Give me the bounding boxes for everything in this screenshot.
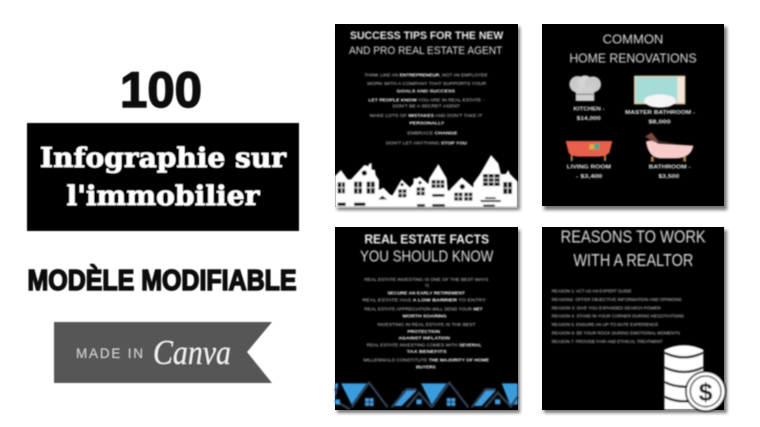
icon: bathroom window picture — [634, 76, 685, 108]
panel: reasons to work with a realtor — [542, 227, 727, 413]
panel: success tips — [335, 24, 520, 210]
heading: reasons: REASONS TO WORK — [561, 227, 706, 247]
reasons list: REASON 6: BE YOUR ROCK DURING EMOTIONAL MOMENTS — [552, 330, 680, 336]
title text: l'immobilier — [66, 181, 260, 212]
reasons list: REASON 1: ACT AS AN EXPERT GUIDE — [552, 288, 632, 294]
facts text: TO — [425, 283, 429, 289]
facts text: REAL ESTATE APPRECIATION WILL SEND YOUR NET — [364, 307, 483, 313]
panel: real estate facts: YOU SHOULD KNOW — [360, 249, 494, 266]
heading: facts: REAL ESTATE FACTS — [364, 232, 489, 247]
heading: reasons — [561, 227, 706, 270]
tips text: LET PEOPLE KNOW YOU ARE IN REAL ESTATE - — [368, 97, 485, 103]
room labels: $3,500 — [658, 174, 679, 180]
heading: renovations — [569, 32, 697, 65]
heading: reasons: WITH A REALTOR — [573, 250, 693, 270]
made in Canva ribbon: MADE IN — [76, 346, 143, 361]
reasons list — [552, 288, 684, 345]
heading: renovations: HOME RENOVATIONS — [569, 50, 697, 65]
heading: success tips — [349, 30, 504, 57]
icon: coin stack with dollar — [664, 345, 726, 412]
tips text — [364, 72, 488, 147]
heading: success tips: AND PRO REAL ESTATE AGENT — [349, 45, 503, 57]
heading: success tips: SUCCESS TIPS FOR THE NEW — [350, 30, 504, 42]
reasons list: REASON2: OFFER OBJECTIVE INFORMATION AND OPINIONS — [552, 297, 682, 303]
room labels: MASTER BATHROOM - — [625, 110, 695, 116]
panel: common home renovations — [542, 24, 727, 210]
heading: renovations: COMMON — [603, 32, 663, 47]
tips text: DON'T BE A SECRET AGENT — [393, 104, 460, 110]
tips text: PERSONALLY — [409, 121, 445, 127]
facts text: SECURE AN EARLY RETIREMENT — [387, 290, 465, 296]
facts text: REAL ESTATE HAS A LOW BARRIER TO ENTRY — [362, 298, 487, 304]
reasons list: REASON 4: STAND IN YOUR CORNER DURING NEGOTIATIONS — [552, 314, 684, 320]
title text — [40, 143, 287, 212]
made in Canva ribbon: Canva — [153, 333, 231, 372]
facts text: AGAINST INFLATION — [398, 336, 450, 342]
reasons list: REASON 3: GIVE YOU EXPANDED SEARCH POWER — [552, 305, 661, 311]
illustration: white houses — [335, 155, 518, 207]
tips text: EMBRACE CHANGE — [407, 130, 458, 136]
icon: sofa — [566, 141, 612, 161]
room labels — [567, 106, 695, 180]
made in Canva ribbon — [54, 322, 272, 383]
number 100: 100 — [120, 62, 202, 118]
room labels: $14,000 — [577, 116, 601, 122]
facts text — [362, 277, 490, 370]
icon: chef hat — [569, 75, 601, 101]
facts text: PROTECTION — [407, 329, 440, 335]
reasons list: REASON 7: PROVIDE FAIR AND ETHICAL TREATMENT — [552, 339, 663, 345]
facts text: REAL ESTATE INVESTING IS ONE OF THE BEST WAYS — [364, 277, 489, 283]
title box — [27, 123, 299, 231]
room labels: BATHROOM - — [649, 164, 691, 170]
tips text: DON'T LET ANYTHING STOP YOU — [386, 141, 467, 147]
facts text: REAL ESTATE INVESTING COMES WITH SEVERAL — [367, 342, 482, 348]
room labels: $8,000 — [648, 120, 671, 126]
panel: real estate facts — [335, 227, 520, 413]
facts text: TAX BENEFITS — [407, 349, 447, 355]
subtitle: modèle modifiable: MODÈLE MODIFIABLE — [28, 263, 296, 297]
title text: Infographie sur — [40, 143, 287, 174]
facts text: BUYERS — [416, 364, 436, 370]
illustration: blue roofs — [335, 383, 518, 409]
tips text: WORK WITH A COMPANY THAT SUPPORTS YOUR — [367, 81, 487, 87]
icon: bathtub — [645, 132, 693, 162]
facts text: WORTH SOARING — [402, 313, 447, 319]
icon: coin stack with dollar: $ — [699, 379, 713, 406]
tips text: MAKE LOTS OF MISTAKES AND DON'T TAKE IT — [370, 113, 482, 119]
room labels: LIVING ROOM — [567, 164, 611, 170]
tips text: GOALS AND SUCCESS — [397, 88, 456, 94]
facts text: INVESTING IN REAL ESTATE IS THE BEST — [377, 322, 476, 328]
tips text: THINK LIKE AN ENTREPRENEUR, NOT AN EMPLOYEE — [364, 72, 488, 78]
facts text: MILLENNIALS CONSTITUTE THE MAJORITY OF HOME — [363, 357, 490, 363]
reasons list: REASON 5: ENSURE AN UP-TO-DATE EXPERIENCE — [552, 322, 659, 328]
room labels: - $3,400 — [576, 174, 602, 180]
room labels: KITCHEN - — [573, 106, 605, 112]
